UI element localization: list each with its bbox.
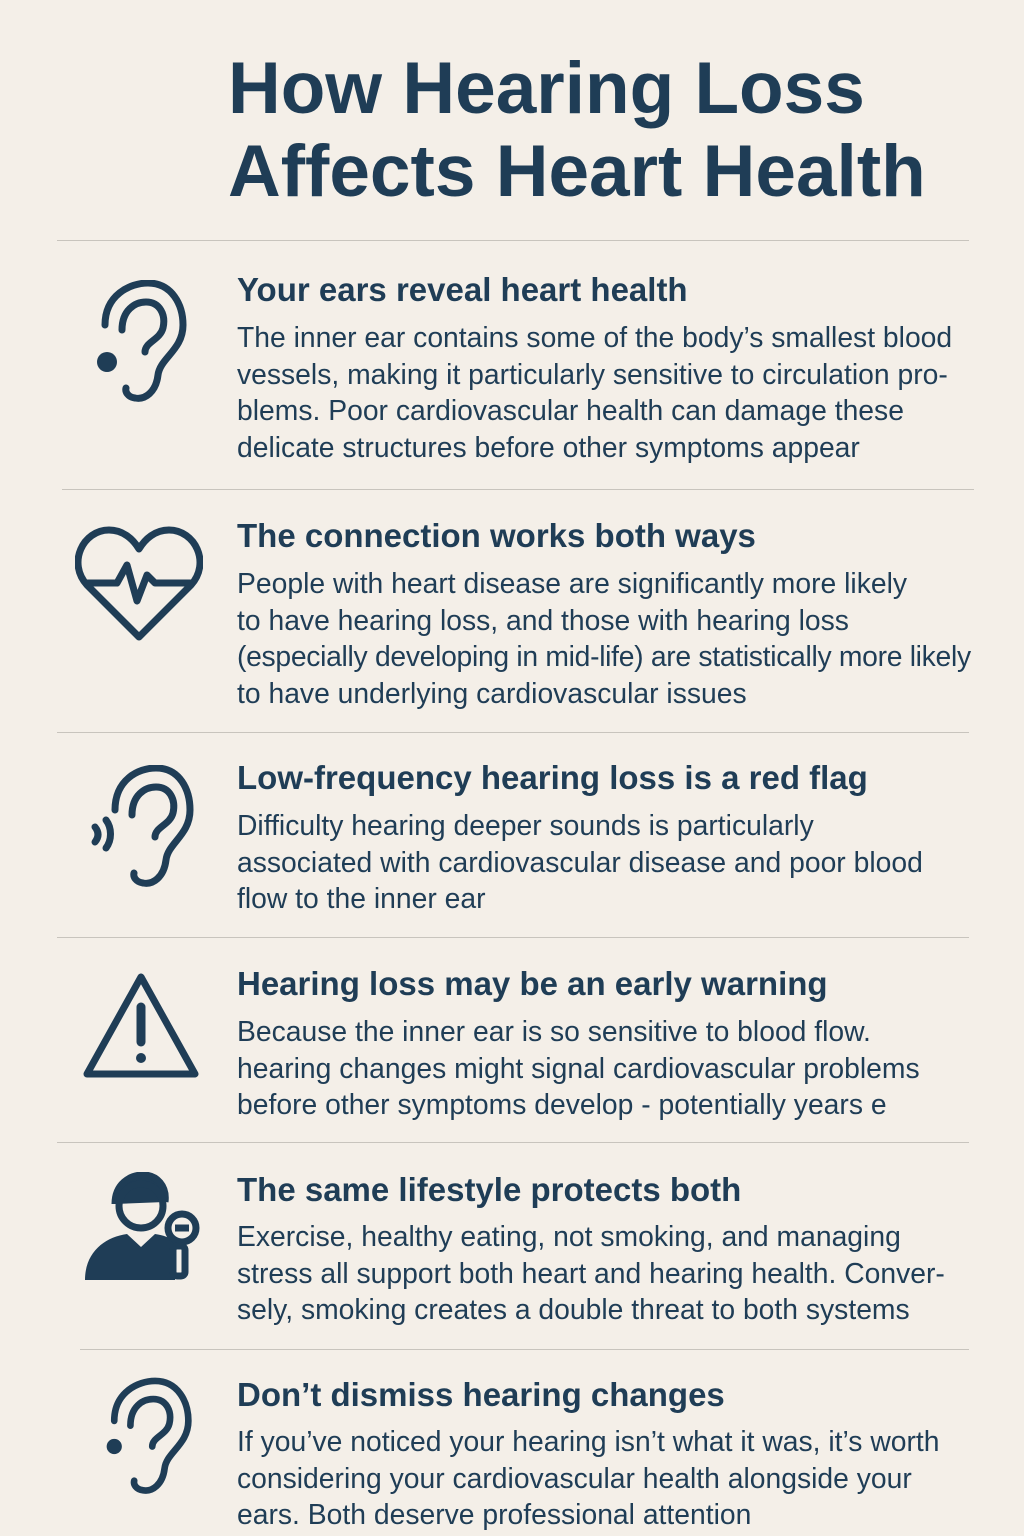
body 5: sely, smoking creates a double threat to both systems	[237, 1293, 910, 1325]
body 2: People with heart disease are significantly more likely	[237, 567, 907, 599]
body 6	[237, 1425, 940, 1530]
body 3: associated with cardiovascular disease and poor blood	[237, 846, 923, 878]
title	[228, 48, 926, 212]
body 2	[237, 567, 972, 709]
icon: heart with pulse	[75, 526, 203, 640]
body 6: If you’ve noticed your hearing isn’t what it was, it’s worth	[237, 1425, 940, 1457]
heading 1: Your ears reveal heart health	[237, 271, 688, 308]
body 5: stress all support both heart and hearing health. Conver-	[237, 1256, 945, 1288]
body 5: Exercise, healthy eating, not smoking, and managing	[237, 1220, 901, 1252]
body 6: ears. Both deserve professional attention	[237, 1498, 751, 1530]
section 4	[237, 965, 920, 1120]
heading 5: The same lifestyle protects both	[237, 1171, 741, 1208]
body 4: before other symptoms develop - potentially years e	[237, 1088, 887, 1120]
icon: ear	[106, 1378, 192, 1494]
body 2: (especially developing in mid-life) are statistically more likely	[237, 640, 971, 672]
icon: person with hearing aid	[85, 1172, 200, 1280]
heading 3: Low-frequency hearing loss is a red flag	[237, 759, 868, 796]
body 2: to have underlying cardiovascular issues	[237, 676, 747, 708]
title: How Hearing Loss	[228, 48, 865, 129]
section 5	[237, 1171, 945, 1325]
body 3: flow to the inner ear	[237, 882, 486, 914]
body 5	[237, 1220, 945, 1325]
section 3	[237, 759, 923, 914]
body 2: to have hearing loss, and those with hearing loss	[237, 604, 849, 636]
icon: ear with dot	[97, 280, 186, 402]
body 4: Because the inner ear is so sensitive to blood flow.	[237, 1015, 871, 1047]
body 1: vessels, making it particularly sensitive to circulation pro-	[237, 358, 948, 390]
icon: warning triangle	[84, 974, 198, 1078]
body 3: Difficulty hearing deeper sounds is particularly	[237, 809, 814, 841]
section 6	[237, 1376, 940, 1530]
title: Affects Heart Health	[228, 131, 926, 212]
icon: ear with sound waves	[92, 765, 194, 887]
body 1: delicate structures before other symptoms appear	[237, 430, 860, 462]
body 1: The inner ear contains some of the body’s smallest blood	[237, 321, 952, 353]
body 4: hearing changes might signal cardiovascular problems	[237, 1052, 920, 1084]
body 3	[237, 809, 923, 914]
heading 2: The connection works both ways	[237, 517, 756, 554]
body 1	[237, 321, 952, 463]
body 4	[237, 1015, 920, 1120]
section 2	[237, 517, 972, 709]
section 1	[237, 271, 952, 463]
body 1: blems. Poor cardiovascular health can damage these	[237, 394, 904, 426]
heading 6: Don’t dismiss hearing changes	[237, 1376, 725, 1413]
heading 4: Hearing loss may be an early warning	[237, 965, 828, 1002]
body 6: considering your cardiovascular health alongside your	[237, 1462, 912, 1494]
